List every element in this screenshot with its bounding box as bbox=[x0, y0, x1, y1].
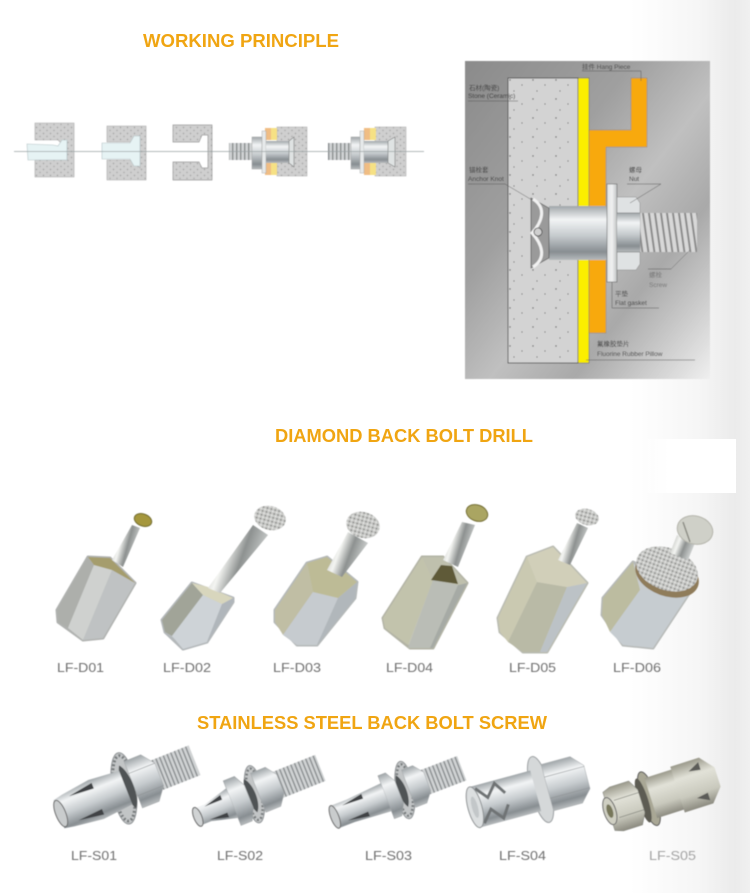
row: stainless screws bbox=[42, 725, 726, 863]
step 1: drilling the hole bbox=[27, 123, 74, 177]
drill LF-D06 label: LF-D06 bbox=[613, 660, 661, 675]
screw LF-S03 bbox=[320, 740, 473, 847]
bolt sleeve bbox=[549, 206, 607, 260]
screw LF-S01 bbox=[42, 725, 208, 850]
labels and leaders: Stone (Ceramic) bbox=[468, 93, 515, 100]
drill LF-D04 bbox=[383, 502, 490, 648]
labels and leaders: 锚栓套 bbox=[469, 165, 489, 174]
labels and leaders: Anchor Knot bbox=[468, 176, 504, 183]
step 3: finished undercut hole bbox=[173, 125, 212, 180]
labels and leaders: 石材(陶瓷) bbox=[469, 83, 499, 92]
title: working principle: WORKING PRINCIPLE bbox=[143, 31, 339, 51]
drill LF-D06 bbox=[602, 512, 716, 648]
screw LF-S04 label: LF-S04 bbox=[499, 848, 546, 863]
panel: anchor cross section bbox=[465, 61, 710, 379]
step 2: undercut drilling bbox=[102, 126, 146, 180]
drill LF-D04 label: LF-D04 bbox=[386, 660, 433, 675]
labels and leaders: Nut bbox=[629, 176, 639, 183]
diagram: five step working principle bbox=[14, 123, 424, 180]
labels and leaders: 挂件 Hang Piece bbox=[582, 62, 631, 71]
labels and leaders: 氟橡胶垫片 bbox=[597, 339, 630, 348]
screw LF-S01 label: LF-S01 bbox=[71, 848, 117, 863]
flat gasket bbox=[607, 184, 617, 282]
drill LF-D01 label: LF-D01 bbox=[57, 660, 104, 675]
drill LF-D03 bbox=[275, 508, 383, 645]
labels and leaders: 螺母 bbox=[629, 165, 642, 174]
labels and leaders: Screw bbox=[649, 282, 667, 289]
stone slab bbox=[508, 78, 578, 363]
step 5: anchor expanded bbox=[328, 127, 406, 176]
heading: diamond back bolt drill: DIAMOND BACK BOLT DRILL bbox=[275, 426, 533, 446]
drill LF-D05 label: LF-D05 bbox=[509, 660, 556, 675]
labels and leaders bbox=[468, 62, 695, 360]
row: diamond drills bbox=[57, 502, 716, 675]
drill LF-D02 bbox=[162, 502, 289, 649]
brushed steel background bbox=[465, 61, 710, 379]
hang piece bbox=[589, 78, 647, 333]
step 4: anchor inserted bbox=[229, 127, 307, 176]
labels and leaders: Fluorine Rubber Pillow bbox=[597, 351, 663, 358]
centre line bbox=[14, 150, 424, 152]
anchor knot bbox=[531, 198, 549, 268]
screw thread bbox=[640, 213, 697, 252]
screw LF-S05 label: LF-S05 bbox=[649, 848, 696, 863]
labels and leaders: Flat gasket bbox=[615, 300, 647, 307]
screw LF-S05 bbox=[596, 750, 726, 840]
drill LF-D05 bbox=[498, 506, 601, 652]
drill LF-D03 label: LF-D03 bbox=[273, 660, 321, 675]
heading: stainless steel back bolt screw: STAINLESS STEEL BACK BOLT SCREW bbox=[197, 713, 547, 733]
rubber pillow bbox=[578, 78, 589, 363]
labels and leaders: 螺栓 bbox=[649, 270, 662, 279]
screw LF-S02 bbox=[183, 740, 332, 846]
screw LF-S03 label: LF-S03 bbox=[365, 848, 412, 863]
screw LF-S04 bbox=[459, 744, 596, 842]
drill LF-D01 bbox=[57, 511, 154, 640]
labels and leaders: 平垫 bbox=[615, 289, 628, 298]
screw LF-S02 label: LF-S02 bbox=[217, 848, 263, 863]
nut bbox=[617, 197, 640, 270]
drill LF-D02 label: LF-D02 bbox=[163, 660, 211, 675]
